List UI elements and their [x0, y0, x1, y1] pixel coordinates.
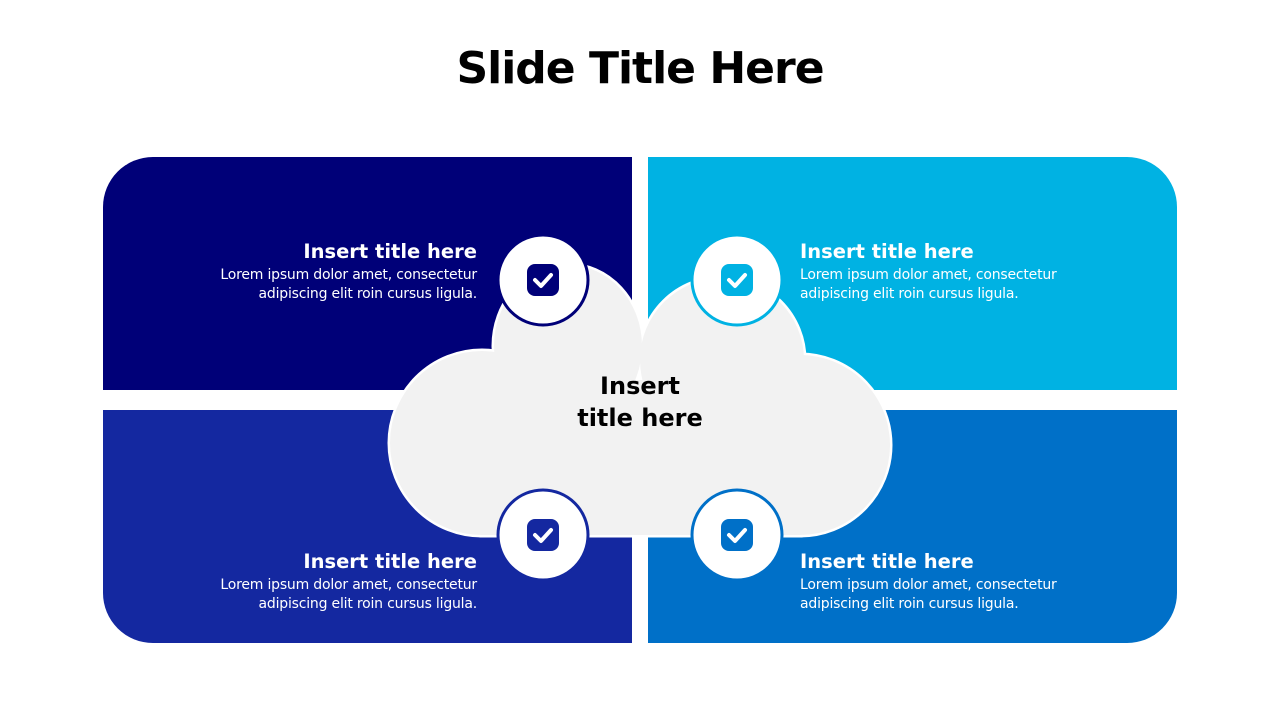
- cloud: [390, 265, 890, 535]
- text: bottom-right: [800, 550, 1057, 612]
- text: top-right: adipiscing elit roin cursus ligula.: [800, 286, 1018, 302]
- text: bottom-left: adipiscing elit roin cursus ligula.: [259, 596, 477, 612]
- title: Slide Title Here: [456, 43, 824, 94]
- text: top-right: [800, 240, 1057, 302]
- text: top-left: adipiscing elit roin cursus ligula.: [259, 286, 477, 302]
- panel: top-right: [648, 157, 1177, 390]
- text: bottom-left: Insert title here: [303, 550, 477, 573]
- panel: top-left: [103, 157, 632, 390]
- cloud title line 2: title here: [577, 404, 703, 432]
- cloud title: Insert: [600, 372, 680, 400]
- icon: check bottom-left: [498, 490, 588, 580]
- text: bottom-left: [220, 550, 478, 612]
- text: bottom-right: Insert title here: [800, 550, 974, 573]
- text: top-right: Lorem ipsum dolor amet, consectetur: [800, 267, 1057, 283]
- text: top-left: Lorem ipsum dolor amet, consectetur: [220, 267, 477, 283]
- panel: bottom-right: [648, 410, 1177, 643]
- text: top-left: [220, 240, 478, 302]
- text: bottom-left: Lorem ipsum dolor amet, consectetur: [220, 577, 477, 593]
- icon: check bottom-right: [692, 490, 782, 580]
- icon: check top-left: [498, 235, 588, 325]
- icon: check top-right: [692, 235, 782, 325]
- text: top-left: Insert title here: [303, 240, 477, 263]
- text: top-right: Insert title here: [800, 240, 974, 263]
- text: bottom-right: adipiscing elit roin cursus ligula.: [800, 596, 1018, 612]
- panel: bottom-left: [103, 410, 632, 643]
- text: bottom-right: Lorem ipsum dolor amet, consectetur: [800, 577, 1057, 593]
